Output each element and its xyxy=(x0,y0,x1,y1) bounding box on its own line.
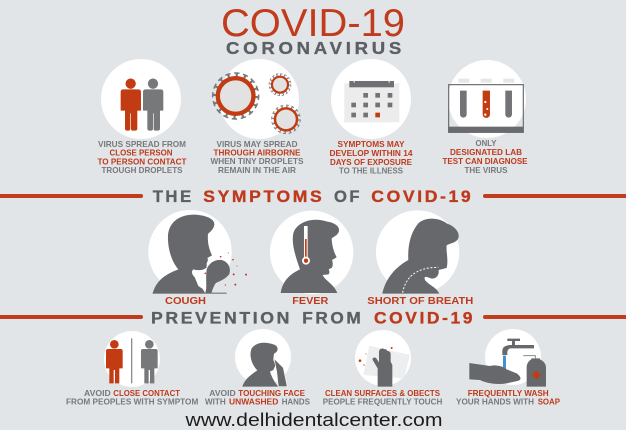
website url: www.delhidentalcenter.com xyxy=(184,409,442,430)
panel: clean surfaces xyxy=(323,330,442,406)
panel: symptoms xyxy=(148,210,473,307)
panel: close contact spread xyxy=(98,59,187,175)
panel: avoid touching face xyxy=(205,329,310,406)
symptom: fever xyxy=(270,211,353,307)
symptom: cough xyxy=(148,210,247,307)
icon: two people xyxy=(121,78,163,131)
text block: ONLY xyxy=(476,138,497,148)
text block: DESIGNATED LAB xyxy=(450,147,522,157)
heading: symptoms: THE xyxy=(153,187,194,206)
text block: VIRUS MAY SPREAD xyxy=(216,139,298,149)
symptom: cough: COUGH xyxy=(165,296,206,307)
text block: HANDS xyxy=(282,396,310,406)
heading: symptoms: COVID-19 xyxy=(371,187,473,206)
heading: prevention: PREVENTION xyxy=(151,308,292,328)
text block xyxy=(323,388,442,406)
icon: person touching face xyxy=(242,343,287,387)
text block: SOAP xyxy=(538,396,560,406)
title: COVID-19 xyxy=(221,2,405,45)
text block: CLEAN SURFACES & OBECTS xyxy=(325,388,440,398)
text block xyxy=(205,388,310,406)
text block: AVOID xyxy=(209,388,236,398)
text block: WHEN TINY DROPLETS xyxy=(210,156,304,166)
panel: airborne spread xyxy=(210,59,304,175)
text block xyxy=(330,139,413,176)
symptom: short of breath xyxy=(367,210,473,307)
text block xyxy=(66,388,198,406)
heading: prevention: FROM xyxy=(302,308,363,328)
panel: avoid close contact xyxy=(66,331,198,406)
text block xyxy=(456,388,560,406)
text block xyxy=(98,139,187,175)
text block: YOUR HANDS WITH xyxy=(456,396,534,406)
text block: FROM PEOPLES WITH SYMPTOM xyxy=(66,396,198,406)
text block: DEVELOP WITHIN 14 xyxy=(330,148,413,158)
panel: wash hands xyxy=(456,329,560,406)
text block: AVOID xyxy=(84,388,111,398)
title: CORONAVIRUS xyxy=(226,38,405,58)
heading: prevention: COVID-19 xyxy=(374,308,475,328)
symptom: short of breath: SHORT OF BREATH xyxy=(367,296,473,307)
text block xyxy=(442,138,528,175)
text block: CLOSE CONTACT xyxy=(113,388,181,398)
text block: THE VIRUS xyxy=(464,165,508,175)
text block: UNWASHED xyxy=(229,396,278,406)
text block: FREQUENTLY WASH xyxy=(468,388,549,398)
icon: calendar xyxy=(344,79,399,122)
text block: CLOSE PERSON xyxy=(110,148,172,158)
heading: symptoms: SYMPTOMS xyxy=(203,187,324,206)
icon: test tubes xyxy=(448,79,524,133)
icon: hand wiping surface xyxy=(359,346,410,387)
text block xyxy=(210,139,304,175)
text block: TO THE ILLNESS xyxy=(339,166,403,176)
panel: lab test xyxy=(442,60,528,175)
text block: TROUGH DROPLETS xyxy=(102,165,183,175)
heading: symptoms xyxy=(153,187,473,206)
text block: VIRUS SPREAD FROM xyxy=(98,139,186,149)
panel: incubation xyxy=(330,59,413,176)
text block: SYMPTOMS MAY xyxy=(338,139,405,149)
text block: DAYS OF EXPOSURE xyxy=(330,157,412,167)
heading: prevention xyxy=(151,308,475,328)
symptom: fever: FEVER xyxy=(292,296,329,307)
heading: symptoms: OF xyxy=(334,187,362,206)
icon: separated people xyxy=(106,338,158,383)
text block: TOUCHING FACE xyxy=(238,388,305,398)
text block: TEST CAN DIAGNOSE xyxy=(442,156,528,166)
text block: WITH xyxy=(205,396,226,406)
icon: faucet, hands and soap xyxy=(469,339,546,387)
text block: REMAIN IN THE AIR xyxy=(218,165,296,175)
text block: TO PERSON CONTACT xyxy=(98,156,187,166)
text block: PEOPLE FREQUENTLY TOUCH xyxy=(323,396,442,406)
text block: THROUGH AIRBORNE xyxy=(214,148,301,158)
icon: virus particles xyxy=(213,73,300,134)
